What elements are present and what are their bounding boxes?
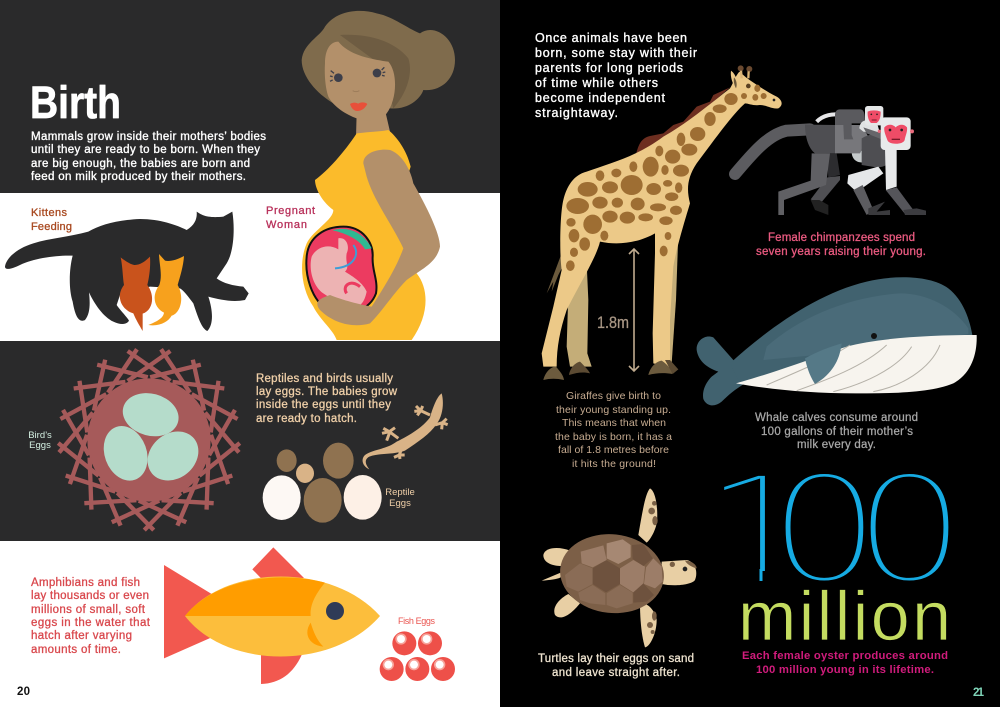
text block: amphibians and fish: amounts of time. — [31, 644, 121, 656]
page number 21: 21 — [973, 687, 985, 699]
illustration: fish eggs — [380, 631, 455, 681]
illustration: nest with bird's eggs — [58, 349, 240, 530]
illustration: pregnant woman — [302, 11, 455, 340]
panel: right page background — [500, 0, 1000, 707]
label: kittens feeding: Kittens — [31, 207, 68, 219]
text block: whale fact: Whale calves consume around — [755, 412, 918, 424]
text block: oyster fact: 100 million young in its lifetime. — [756, 664, 934, 676]
text block: mammals intro — [31, 131, 266, 183]
text block: right page intro: Once animals have been — [535, 31, 687, 45]
text block: turtle fact: and leave straight after. — [552, 667, 680, 679]
label: fish eggs: Fish Eggs — [398, 616, 436, 626]
text block: giraffe fact: their young standing up. — [556, 404, 671, 416]
text block: reptiles and birds: lay eggs. The babies grow — [256, 386, 398, 398]
text block: giraffe fact: This means that when — [562, 417, 666, 429]
label: bird's eggs: Eggs — [29, 440, 51, 451]
text block: mammals intro: are big enough, the babies are born and — [31, 158, 250, 170]
text block: mammals intro: until they are ready to be born. When they — [31, 144, 260, 156]
text block: reptiles and birds: Reptiles and birds usually — [256, 373, 393, 385]
illustration: reptile eggs — [263, 443, 382, 523]
text block: mammals intro: feed on milk produced by their mothers. — [31, 171, 246, 183]
label: reptile eggs: Reptile — [385, 487, 415, 498]
label: pregnant woman — [266, 205, 315, 231]
label: reptile eggs: Eggs — [389, 498, 411, 509]
text block: whale fact: milk every day. — [797, 439, 876, 451]
text block: right page intro: born, some stay with their — [535, 46, 697, 60]
text block: right page intro — [535, 31, 697, 120]
text block: chimpanzee fact — [756, 232, 926, 258]
label: bird's eggs: Bird’s — [28, 430, 52, 441]
text block: right page intro: become independent — [535, 91, 666, 105]
label: pregnant woman: Woman — [266, 219, 307, 231]
text block: amphibians and fish: Amphibians and fish — [31, 577, 140, 589]
text block: amphibians and fish: hatch after varying — [31, 630, 132, 642]
panel: left page background — [0, 0, 500, 707]
text block: amphibians and fish — [31, 577, 151, 656]
illustration: turtle — [542, 488, 697, 647]
text block: reptiles and birds — [256, 373, 398, 425]
text block: amphibians and fish: lay thousands or even — [31, 590, 149, 602]
text block: amphibians and fish: eggs in the water that — [31, 617, 151, 629]
text block: whale fact: 100 gallons of their mother’s — [761, 426, 913, 438]
illustration: whale — [697, 277, 977, 405]
label: kittens feeding — [31, 207, 72, 233]
arrow: giraffe height — [629, 249, 639, 371]
big word: million: million — [738, 577, 951, 655]
label: reptile eggs — [385, 487, 415, 509]
text block: chimpanzee fact: seven years raising their young. — [756, 246, 926, 258]
text block: turtle fact — [538, 653, 694, 679]
text block: oyster fact: Each female oyster produces around — [742, 650, 948, 662]
label: kittens feeding: Feeding — [31, 221, 72, 233]
text block: oyster fact — [742, 650, 948, 676]
text block: giraffe fact: it hits the ground! — [572, 458, 656, 470]
illustration: gecko — [363, 393, 448, 469]
text block: chimpanzee fact: Female chimpanzees spend — [768, 232, 915, 244]
illustration: giraffe — [542, 65, 782, 380]
label: bird's eggs — [28, 430, 52, 451]
text block: giraffe fact: Giraffes give birth to — [566, 390, 661, 402]
text block: giraffe fact — [555, 390, 672, 470]
text block: mammals intro: Mammals grow inside their mothers’ bodies — [31, 131, 266, 143]
text block: right page intro: parents for long periods — [535, 61, 683, 75]
heading: Birth: Birth — [30, 77, 121, 128]
text block: whale fact — [755, 412, 918, 451]
illustration: chimpanzee with baby — [735, 106, 926, 215]
illustration: cat with kittens — [5, 212, 249, 331]
text block: right page intro: of time while others — [535, 76, 658, 90]
big number: 100: 100 — [702, 445, 967, 615]
text block: right page intro: straightaway. — [535, 106, 618, 120]
text block: giraffe fact: fall of 1.8 metres before — [558, 444, 669, 456]
text block: turtle fact: Turtles lay their eggs on sand — [538, 653, 694, 665]
page number 20: 20 — [17, 686, 30, 698]
text block: reptiles and birds: inside the eggs until they — [256, 399, 391, 411]
text block: giraffe fact: the baby is born, it has a — [555, 431, 672, 443]
text block: reptiles and birds: are ready to hatch. — [256, 413, 357, 425]
label: 1.8m: 1.8m — [597, 314, 629, 332]
illustration: fish — [164, 547, 380, 684]
label: pregnant woman: Pregnant — [266, 205, 315, 217]
text block: amphibians and fish: millions of small, soft — [31, 604, 146, 616]
